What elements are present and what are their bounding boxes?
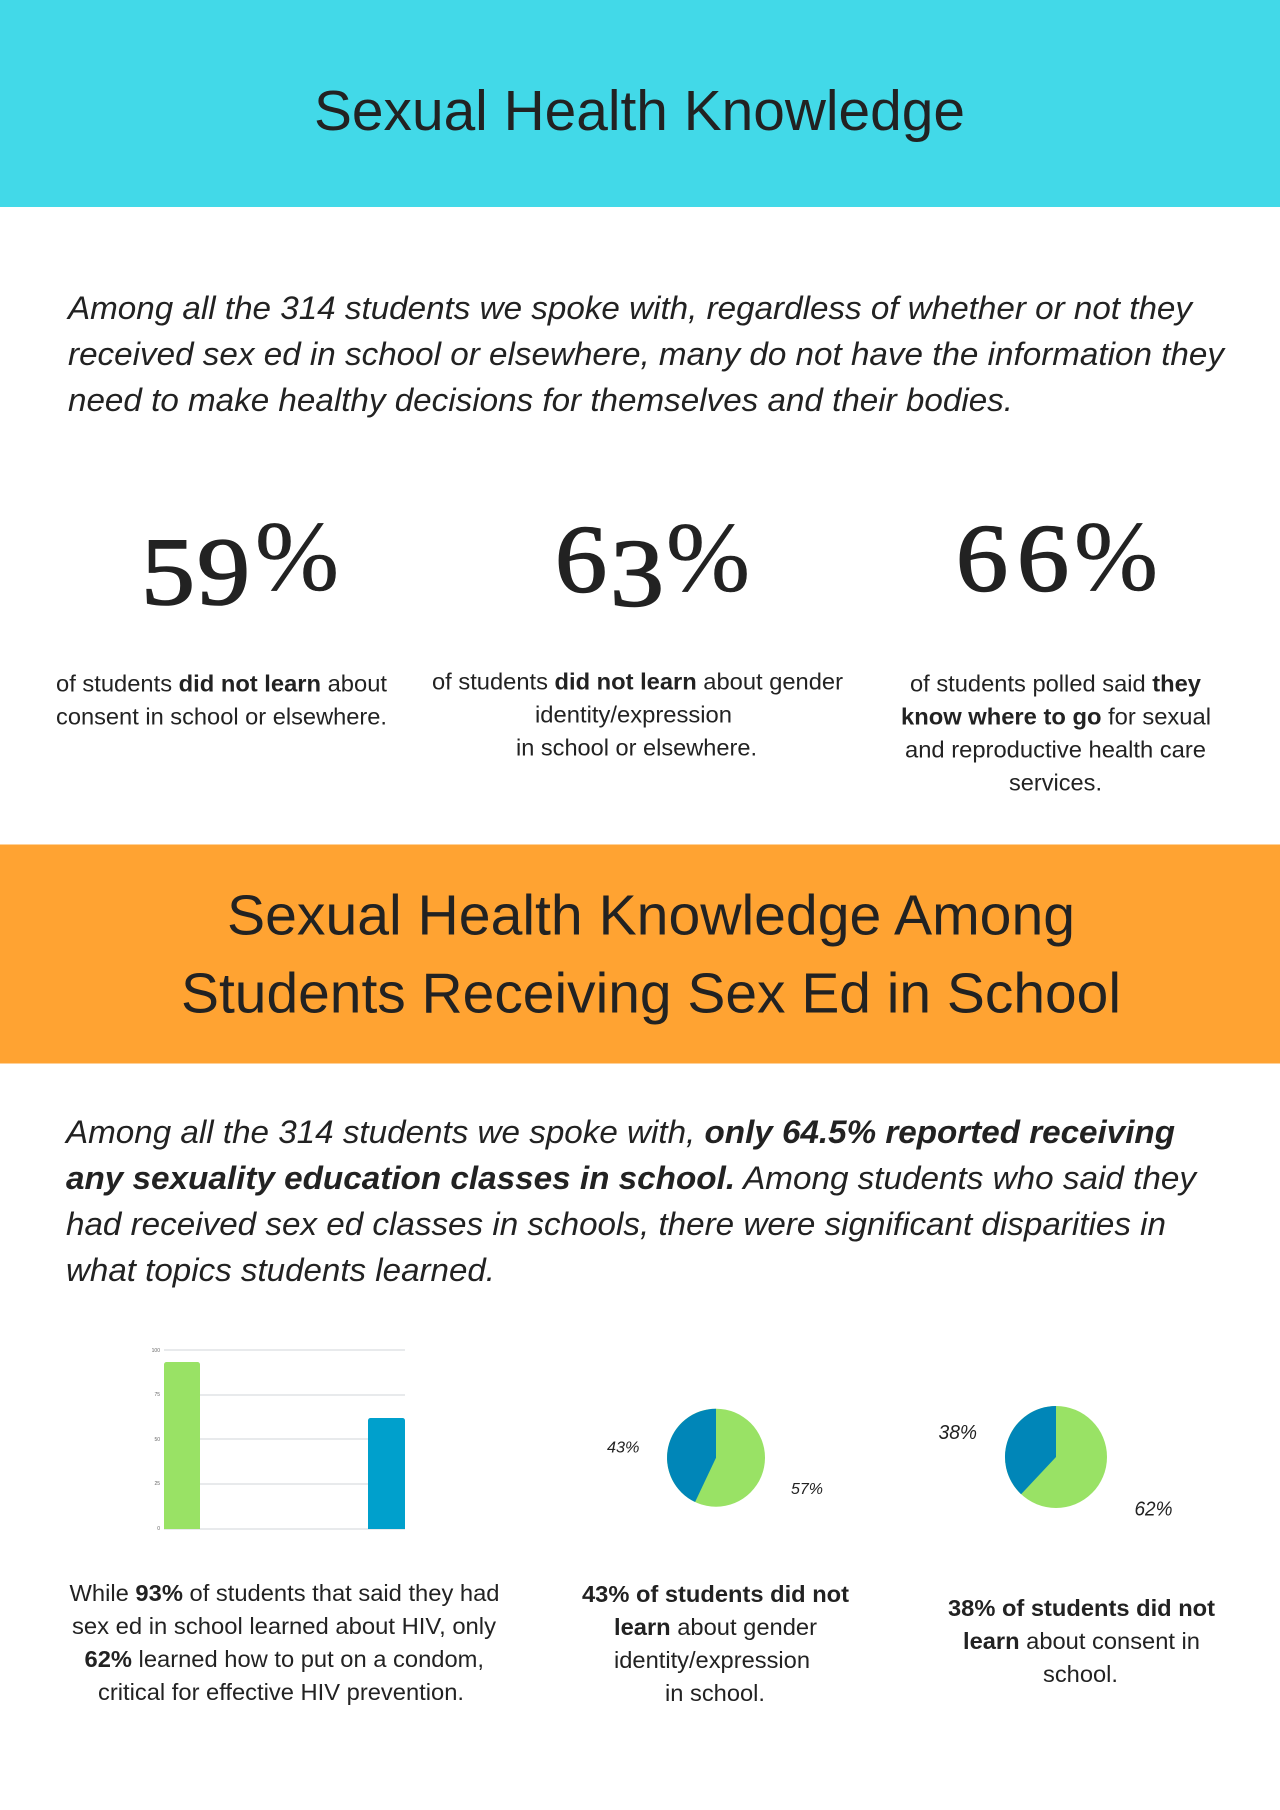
number: 66%: 6 [956,504,1008,612]
number: 63% [555,502,750,626]
text block: stat 63% description: in school or elsewhere. [516,734,757,760]
number: 63%: 6 [555,506,607,612]
label: 43%: 43% [607,1440,640,1456]
text block: stat 66% description [901,670,1211,796]
bar chart: HIV vs condom: 100 [152,1348,160,1354]
text block: second intro paragraph [64,1114,1198,1288]
text block: second intro paragraph: what topics students learned. [66,1252,495,1288]
text block: consent caption: learn about consent in [963,1628,1200,1654]
text block: bar chart caption: critical for effective HIV prevention. [98,1679,464,1705]
text block: consent caption [948,1595,1215,1687]
number: 63%: 3 [610,520,664,626]
text block: stat 63% description: of students did not learn about gender [432,668,843,694]
title: Sexual Health Knowledge [314,79,965,143]
text block: stat 66% description: of students polled said they [910,670,1201,696]
text block: intro paragraph: Among all the 314 students we spoke with, regardless of whether or not they [66,290,1194,326]
text block: intro paragraph: need to make healthy decisions for themselves and their bodies. [68,382,1013,418]
text block: consent caption: 38% of students did not [948,1595,1215,1621]
label: 38%: 38% [938,1422,977,1444]
bar chart: HIV vs condom: 0 [157,1526,160,1532]
text block: gender identity caption: identity/expression [614,1647,810,1673]
text block: stat 66% description: services. [1009,770,1102,796]
text block: gender identity caption: learn about gender [614,1614,817,1640]
bar chart: HIV vs condom: 50 [154,1437,160,1443]
text block: gender identity caption: in school. [665,1680,765,1706]
text block: second intro paragraph: any sexuality education classes in school. Among students who said they [66,1160,1198,1196]
text block: consent caption: school. [1043,1661,1118,1687]
bar: 93% [164,1362,200,1529]
text block: stat 66% description: know where to go for sexual [901,704,1211,730]
text block: bar chart caption: 62% learned how to put on a condom, [84,1646,484,1672]
pie chart: consent [938,1406,1172,1520]
text block: stat 59% description: of students did not learn about [56,670,387,696]
bar chart: HIV vs condom: 75 [154,1392,160,1398]
number: 59%: 9 [197,518,250,625]
text block: stat 59% description [56,670,387,730]
text block: stat 63% description [432,668,843,760]
number: 66% [956,500,1158,612]
number: 66%: 6 [1017,504,1069,612]
number: 59%: % [255,500,339,612]
number: 59%: 5 [141,518,195,625]
number: 66%: % [1074,500,1158,612]
panel: top header banner [0,0,1280,207]
text block: bar chart caption: While 93% of students that said they had [70,1580,500,1606]
text block: stat 63% description: identity/expression [535,702,732,728]
label: 57%: 57% [791,1481,823,1498]
panel: stat 66% [901,500,1211,796]
text block: intro paragraph: received sex ed in school or elsewhere, many do not have the information they [68,336,1226,372]
heading: section two: Sexual Health Knowledge Among [227,884,1075,948]
panel: stat 63% [432,502,843,760]
heading: section two: Students Receiving Sex Ed in School [181,962,1121,1026]
text block: stat 66% description: and reproductive health care [905,736,1206,762]
panel: orange section banner [0,844,1280,1064]
text block: bar chart caption [70,1580,500,1705]
heading: section two [181,884,1121,1026]
number: 63%: % [666,502,750,612]
text block: intro paragraph [66,290,1226,418]
bar: 62% [368,1418,405,1529]
pie chart: gender identity [607,1409,823,1507]
text block: second intro paragraph: Among all the 314 students we spoke with, only 64.5% reported receiving [64,1114,1175,1150]
panel: stat 59% [56,500,387,730]
text block: gender identity caption [582,1581,849,1706]
bar chart: HIV vs condom [152,1348,405,1532]
bar chart: HIV vs condom: 25 [154,1481,160,1487]
number: 59% [141,500,339,625]
text block: stat 59% description: consent in school or elsewhere. [56,704,387,730]
text block: bar chart caption: sex ed in school learned about HIV, only [72,1613,496,1639]
text block: second intro paragraph: had received sex ed classes in schools, there were significant disparities in [66,1206,1166,1242]
label: 62%: 62% [1134,1498,1172,1520]
text block: gender identity caption: 43% of students did not [582,1581,849,1607]
